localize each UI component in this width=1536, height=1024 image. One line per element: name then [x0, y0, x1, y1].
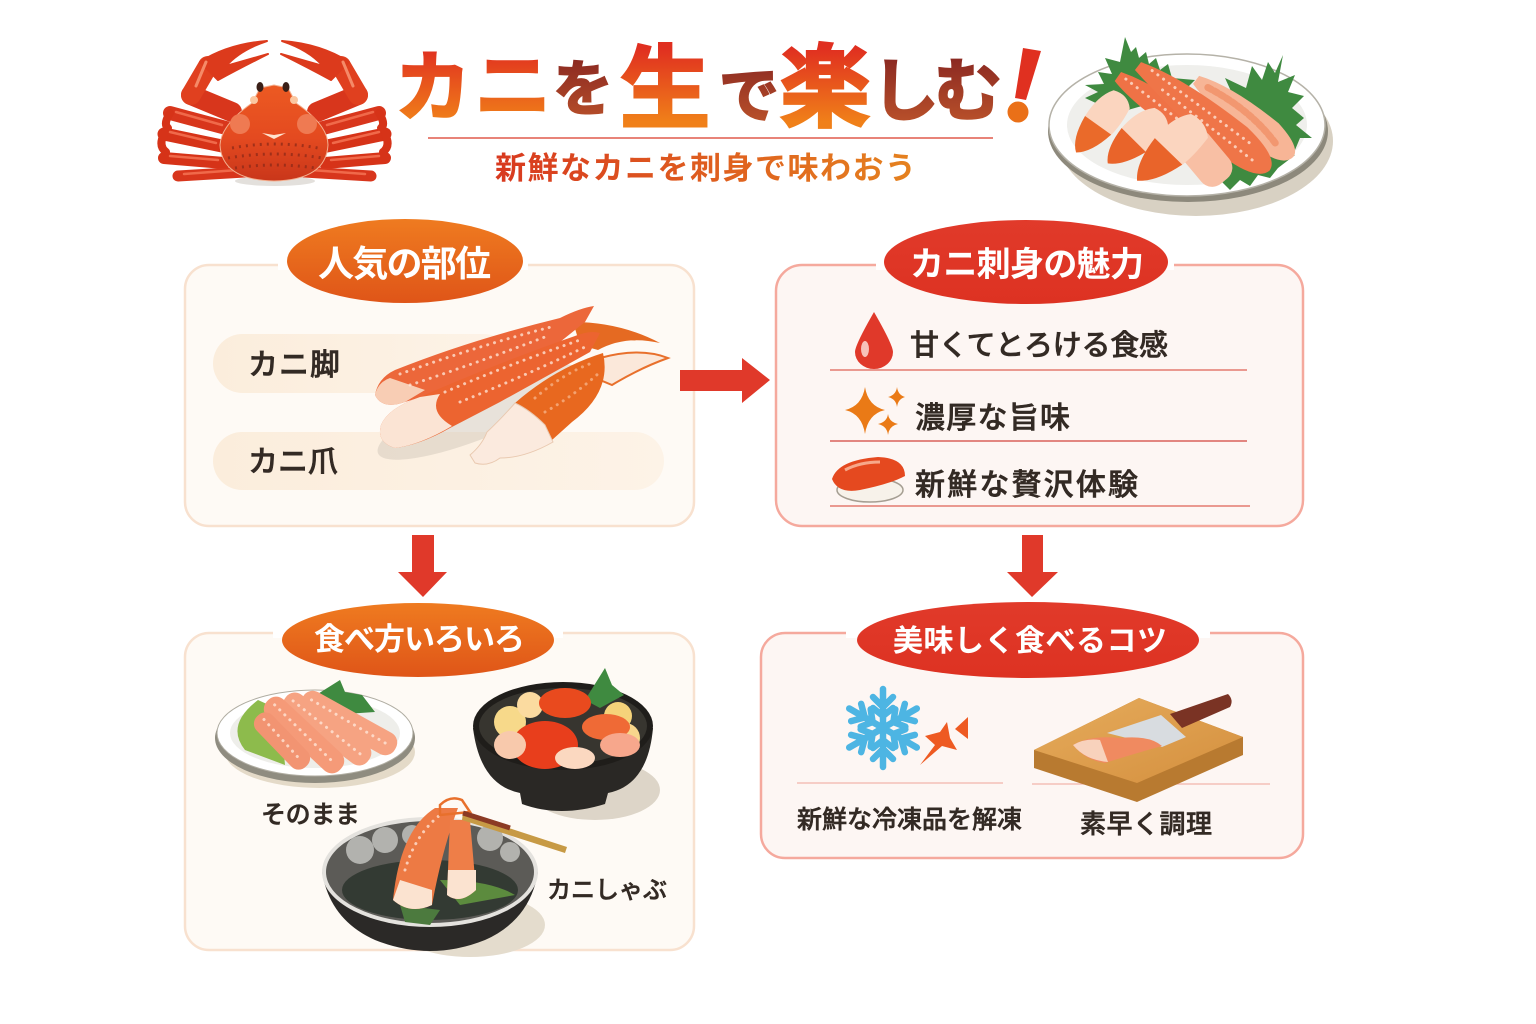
icon: crab sushi: [832, 457, 905, 502]
title: [395, 39, 1041, 140]
text: cook quickly: 素早く調理: [1080, 809, 1212, 839]
title: で: [719, 63, 779, 130]
heading: 人気の部位: 人気の部位: [318, 243, 491, 284]
arrow: right: [680, 358, 770, 403]
label: カニ爪: [213, 432, 664, 490]
panel: tips: [761, 602, 1303, 858]
illustration: crab rice bowl: [473, 668, 660, 820]
illustration: crab shabu pot: [322, 798, 567, 957]
text: sweet melting texture: 甘くてとろける食感: [910, 329, 1168, 362]
label: カニ脚: カニ脚: [248, 349, 340, 382]
arrow: down left: [398, 535, 447, 597]
title: し: [871, 54, 939, 130]
illustration: plate of crab: [215, 680, 415, 788]
panel: appeal of crab sashimi: [776, 220, 1303, 526]
header: [161, 37, 1333, 216]
illustration: crab sashimi plate: [1048, 37, 1333, 216]
icon: thaw burst: [920, 717, 968, 765]
heading: 美味しく食べるコツ: [857, 602, 1199, 678]
illustration: cutting board with knife and crab: [1034, 694, 1243, 802]
panel: popular parts: [185, 219, 694, 526]
heading: カニ刺身の魅力: [884, 220, 1168, 304]
label: カニ脚: [213, 334, 513, 393]
icon: sparkles: [845, 387, 905, 435]
icon: snowflake: [844, 689, 922, 767]
heading: 食べ方いろいろ: [282, 603, 554, 677]
label: カニしゃぶ: カニしゃぶ: [547, 877, 667, 904]
icon: red drop: [855, 312, 893, 369]
text: rich umami: 濃厚な旨味: [915, 402, 1070, 435]
title: 楽: [780, 39, 870, 139]
arrow: down right: [1007, 535, 1058, 597]
title: ニ: [475, 45, 551, 130]
label: そのまま: そのまま: [261, 801, 360, 829]
title: カ: [395, 46, 471, 131]
illustration: crab legs and claw: [368, 306, 668, 477]
title: を: [553, 56, 613, 123]
title: む: [934, 54, 1002, 130]
heading: カニ刺身の魅力: カニ刺身の魅力: [910, 246, 1144, 284]
heading: 人気の部位: [287, 219, 523, 303]
label: カニ爪: カニ爪: [248, 446, 338, 479]
icon: red crab: [161, 41, 388, 186]
heading: 美味しく食べるコツ: 美味しく食べるコツ: [893, 625, 1167, 658]
heading: 食べ方いろいろ: 食べ方いろいろ: [314, 622, 525, 657]
text: thaw fresh frozen: 新鮮な冷凍品を解凍: [797, 806, 1022, 834]
subtitle: 新鮮なカニを刺身で味わおう: [495, 151, 916, 186]
text: fresh luxury experience: 新鮮な贅沢体験: [915, 469, 1138, 502]
panel: ways to eat: [185, 603, 694, 957]
title: 生: [620, 40, 710, 140]
